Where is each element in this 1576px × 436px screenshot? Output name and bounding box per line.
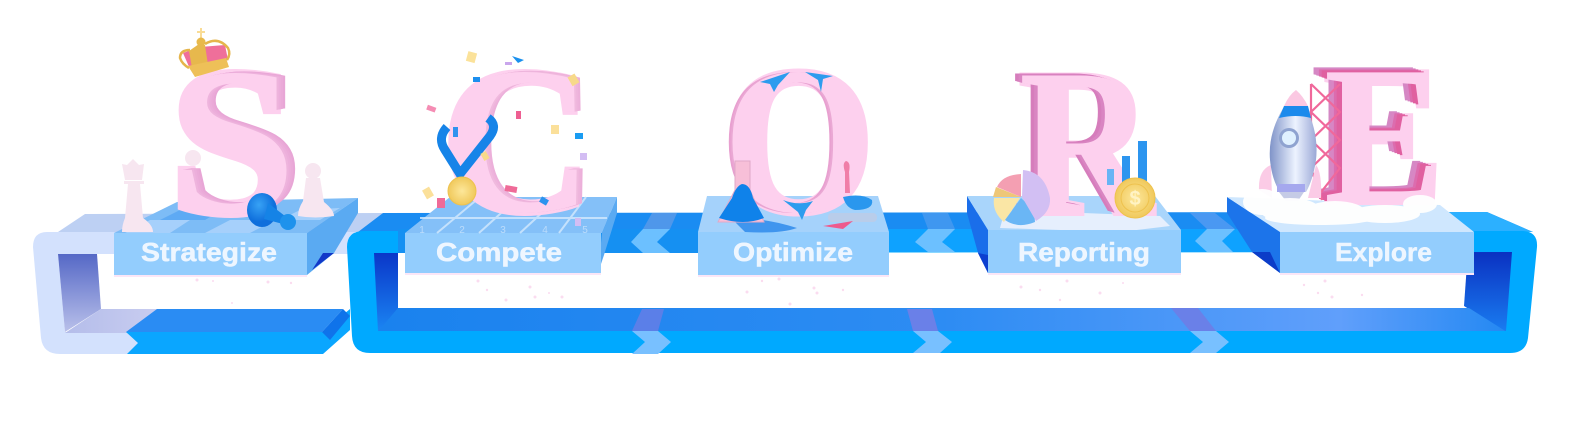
icon: chess pawns	[185, 150, 334, 218]
letter R: R	[1019, 27, 1152, 259]
lane numbers: 3	[500, 225, 506, 236]
lane numbers: 4	[542, 225, 548, 236]
icon: blue drips on O	[760, 72, 850, 220]
label: Reporting: Reporting	[1018, 237, 1150, 267]
icon: blue toppled pawn	[247, 193, 296, 230]
letter O: O	[723, 25, 874, 257]
letter E: E	[1324, 26, 1443, 245]
icon: pie chart	[993, 170, 1050, 225]
light loop: strategize return belt	[33, 213, 383, 354]
label: Optimize: Optimize	[733, 237, 853, 267]
icon: flask with blue liquid and spills	[718, 161, 877, 232]
particles under blocks	[196, 278, 1363, 306]
lane numbers: 5	[582, 225, 588, 236]
label: Compete: Compete	[436, 237, 562, 267]
icon: gold coin	[1115, 178, 1155, 218]
icon: bar chart	[1107, 141, 1147, 185]
block: Strategize	[114, 198, 358, 277]
lane numbers: 1	[419, 225, 425, 236]
icon: gold coin: $	[1129, 188, 1141, 210]
lower chevrons pointing right	[632, 308, 1229, 354]
icon: chess queen	[122, 159, 153, 232]
confetti	[422, 51, 587, 226]
letter C: C	[441, 25, 593, 257]
lane numbers	[419, 225, 588, 236]
block: Reporting	[967, 196, 1181, 275]
lane numbers: 2	[459, 225, 465, 236]
big loop: belt surfaces	[347, 212, 1537, 353]
label: Explore: Explore	[1335, 237, 1432, 267]
block: Optimize	[698, 196, 889, 277]
block: Explore	[1227, 197, 1474, 275]
icon: medal with ribbon	[441, 118, 494, 205]
icon: smoke clouds	[1243, 189, 1437, 225]
block: Compete	[405, 197, 617, 275]
labels	[141, 237, 1432, 267]
icon: launch tower	[1311, 84, 1340, 200]
letter S: S	[170, 26, 296, 258]
blue return segment under strategize	[126, 309, 350, 354]
icon: rocket	[1259, 90, 1321, 201]
label: Strategize: Strategize	[141, 237, 277, 267]
upper chevrons pointing left	[631, 213, 1235, 253]
icon: crown	[180, 28, 229, 77]
